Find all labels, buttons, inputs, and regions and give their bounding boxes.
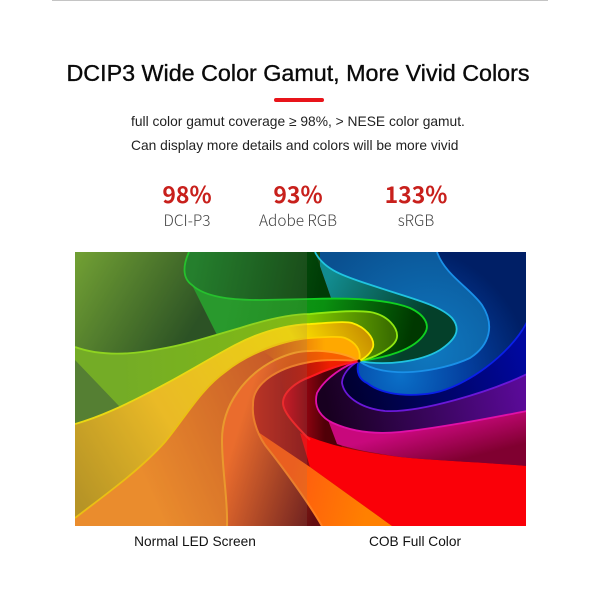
stat: sRGB: sRGB <box>398 209 434 231</box>
description line 2: Can display more details and colors will be more vivid <box>131 138 458 153</box>
left warm sheets <box>75 311 397 526</box>
stat: Adobe RGB: 93% <box>273 176 323 210</box>
stat: Adobe RGB <box>259 176 337 231</box>
stat: Adobe RGB: Adobe RGB <box>259 209 337 231</box>
normal LED dimming overlay <box>75 252 307 526</box>
title: DCIP3 Wide Color Gamut, More Vivid Colors <box>66 60 530 86</box>
stat: sRGB <box>385 176 447 231</box>
left top green sheets <box>75 252 427 361</box>
title accent bar <box>274 98 324 102</box>
description line 1: full color gamut coverage ≥ 98%, > NESE color gamut. <box>131 114 465 129</box>
right spiral bands <box>315 252 527 433</box>
comparison image <box>75 252 526 526</box>
lower right red sheets <box>258 411 527 526</box>
stat: DCI-P3 <box>162 176 212 231</box>
stat: sRGB: 133% <box>385 176 447 210</box>
caption: normal LED: Normal LED Screen <box>134 534 256 549</box>
caption: COB: COB Full Color <box>369 534 461 549</box>
inner warm arcs near swirl centre <box>268 338 359 390</box>
stat: DCI-P3: DCI-P3 <box>164 209 210 231</box>
sheet edge highlights <box>75 252 527 526</box>
stat: DCI-P3: 98% <box>162 176 212 210</box>
